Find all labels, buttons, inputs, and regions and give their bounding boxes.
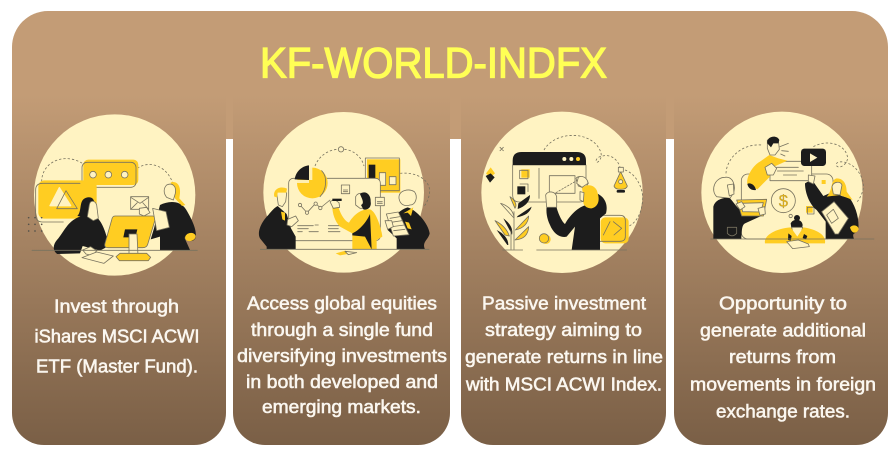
- text: passive strategy: [465, 294, 663, 394]
- panel: master fund: [12, 95, 226, 445]
- text: passive strategy: Passive investment: [482, 294, 646, 314]
- text: foreign exchange: returns from: [729, 347, 836, 367]
- panel 1 background: [12, 95, 226, 445]
- text: master fund: [34, 297, 200, 377]
- panel: foreign exchange: [674, 95, 888, 445]
- panel 4 background: [674, 95, 888, 445]
- text: master fund: iShares MSCI ACWI: [34, 327, 200, 347]
- text: global equities: diversifying investments: [237, 346, 447, 366]
- text: global equities: emerging markets.: [262, 397, 421, 417]
- text: passive strategy: strategy aiming to: [485, 320, 642, 340]
- text: passive strategy: with MSCI ACWI Index.: [465, 374, 662, 394]
- text: global equities: Access global equities: [247, 294, 437, 314]
- icon: circle with team around dollar sign: $: [779, 192, 788, 211]
- icon: circle with team around presentation board: [259, 112, 430, 273]
- panel: passive strategy: [461, 95, 666, 445]
- text: global equities: [237, 294, 447, 417]
- text: passive strategy: generate returns in line: [465, 347, 663, 367]
- panel 2 background: [233, 95, 450, 445]
- text: global equities: in both developed and: [246, 372, 438, 392]
- text: foreign exchange: movements in foreign: [690, 374, 876, 394]
- text: master fund: Invest through: [54, 297, 179, 317]
- text: foreign exchange: Opportunity to: [719, 294, 847, 314]
- header banner: [12, 11, 888, 139]
- text: master fund: ETF (Master Fund).: [36, 357, 198, 377]
- text: foreign exchange: [690, 294, 876, 422]
- text: foreign exchange: exchange rates.: [716, 402, 850, 422]
- text: global equities: through a single fund: [251, 320, 433, 340]
- text: foreign exchange: generate additional: [700, 320, 866, 340]
- panel 3 background: [461, 95, 666, 445]
- panel: global equities: [233, 95, 450, 445]
- icon: circle with designer at browser window: [481, 112, 643, 273]
- icon: circle with two colleagues at a monitor: [28, 114, 197, 276]
- title: KF-WORLD-INDFX: [260, 39, 607, 87]
- icon: circle with team around dollar sign: [701, 112, 874, 273]
